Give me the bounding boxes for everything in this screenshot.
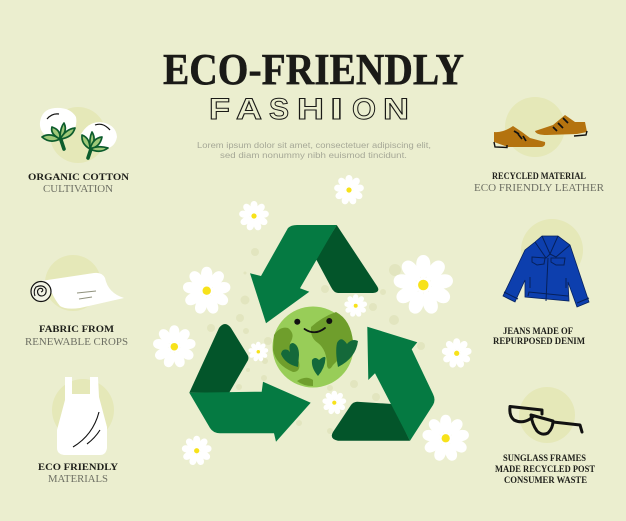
subtitle: fashion: H — [297, 93, 324, 126]
label: denim: REPURPOSED DENIM — [493, 337, 585, 347]
label: denim: JEANS MADE OF — [503, 327, 573, 337]
label: leather — [474, 172, 604, 194]
label: fabric: FABRIC FROM — [39, 325, 114, 335]
intro text: sed diam nonummy nibh euismod tincidunt. — [220, 150, 407, 160]
subtitle: fashion: I — [330, 93, 343, 126]
label: sunglass frames: SUNGLASS FRAMES — [503, 454, 586, 464]
label: organic cotton: CULTIVATION — [43, 184, 113, 195]
label: materials: ECO FRIENDLY — [38, 463, 118, 473]
background dots — [207, 248, 425, 434]
label: organic cotton — [28, 173, 129, 195]
intro text: Lorem ipsum dolor sit amet, consectetuer adipiscing elit, — [197, 140, 431, 150]
subtitle: fashion: S — [269, 93, 289, 126]
label: fabric — [25, 325, 128, 348]
label: materials — [38, 463, 118, 485]
icon: leather shoes — [494, 97, 587, 157]
daisies — [152, 175, 472, 466]
subtitle: fashion: N — [383, 93, 409, 126]
title: ECO-FRIENDLY — [163, 45, 464, 94]
recycle arrow: right — [332, 327, 434, 441]
label: sunglass frames: MADE RECYCLED POST — [495, 465, 596, 475]
icon: fabric roll — [31, 255, 124, 311]
label: fabric: RENEWABLE CROPS — [25, 337, 128, 348]
label: denim — [493, 327, 585, 347]
label: sunglass frames: CONSUMER WASTE — [504, 476, 587, 486]
label: materials: MATERIALS — [48, 474, 108, 485]
recycle arrow: left — [189, 324, 311, 442]
subtitle: fashion: F — [209, 93, 230, 126]
icon: cotton — [40, 107, 117, 163]
icon: shopping bag — [52, 377, 114, 455]
subtitle: fashion — [209, 93, 409, 126]
icon: denim jacket — [503, 219, 589, 307]
face — [294, 318, 332, 332]
label: sunglass frames — [495, 454, 596, 486]
subtitle: fashion: O — [352, 93, 376, 126]
label: leather: ECO FRIENDLY LEATHER — [474, 183, 604, 194]
recycle arrow: top — [250, 225, 378, 323]
hearts — [281, 339, 358, 376]
intro text — [197, 140, 431, 160]
icon: glasses — [510, 387, 582, 443]
earth globe with smiling face — [272, 306, 358, 388]
subtitle: fashion: A — [236, 93, 262, 126]
label: leather: RECYCLED MATERIAL — [492, 172, 586, 182]
label: organic cotton: ORGANIC COTTON — [28, 173, 129, 183]
